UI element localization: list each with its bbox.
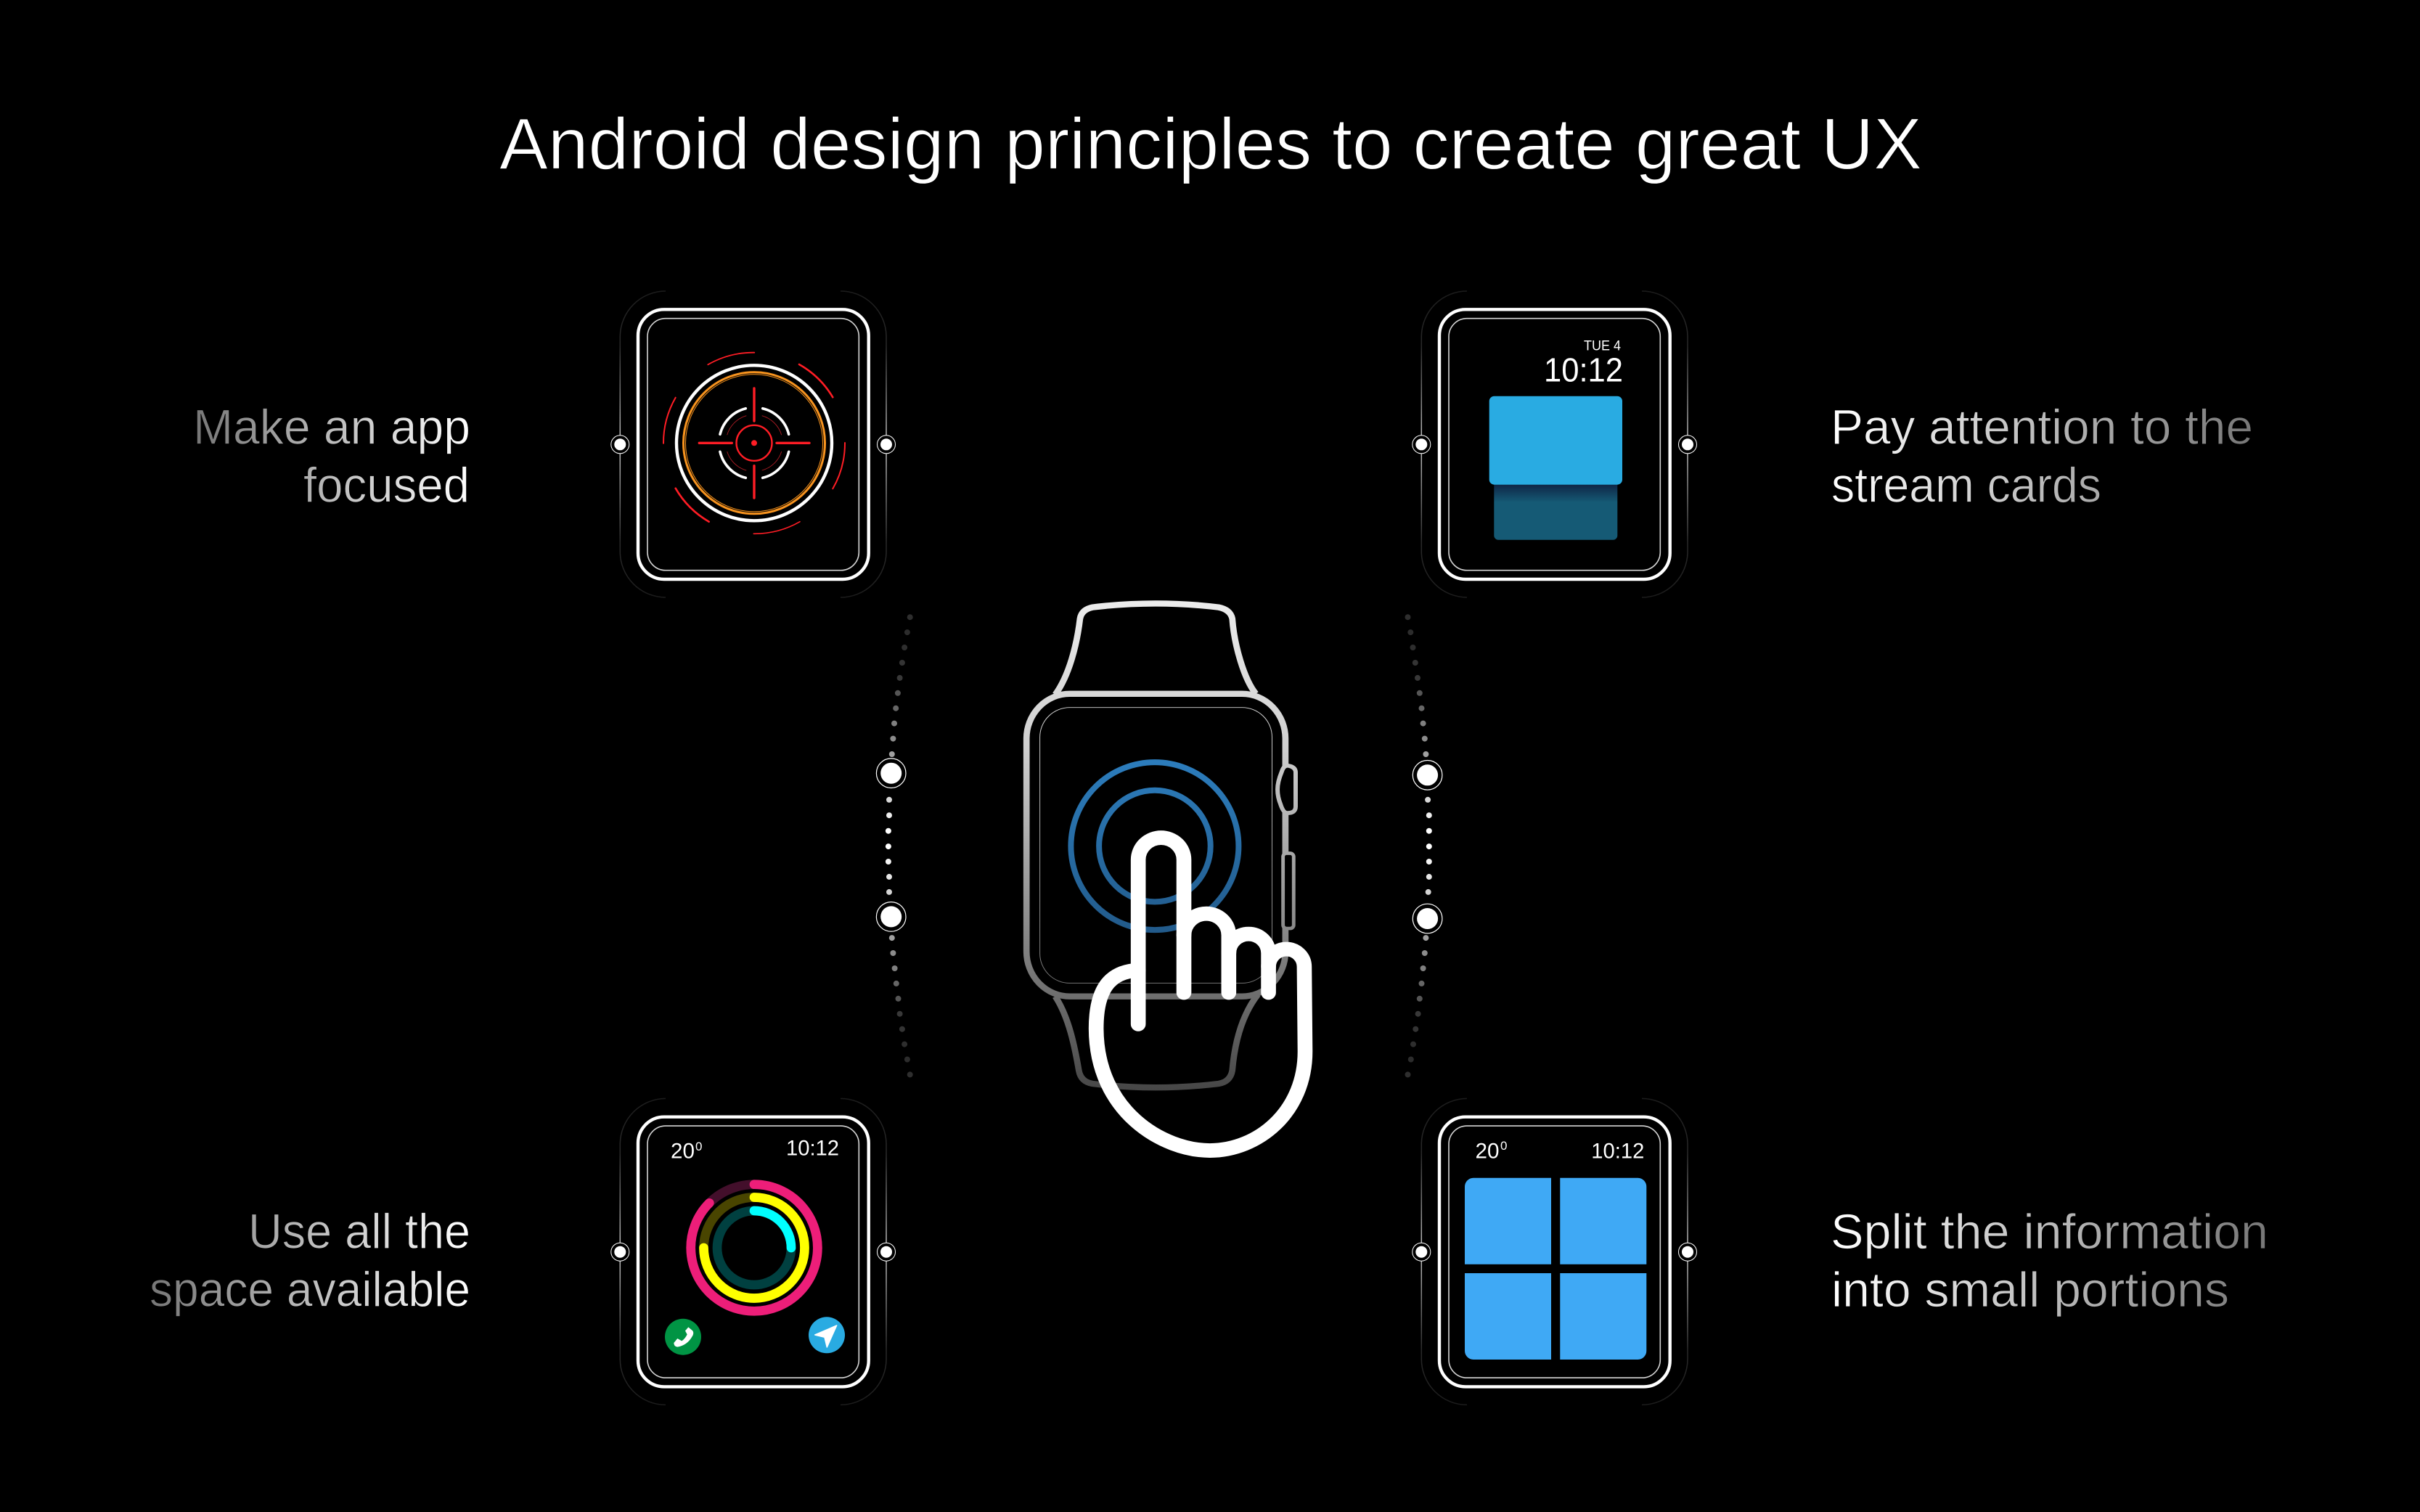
label: pay attention to the stream cards <box>1831 400 2253 513</box>
title: Android design principles to create great UX <box>499 104 1922 185</box>
screen edge <box>1040 708 1272 983</box>
watch: stream cards <box>1413 291 1697 597</box>
label: use all the space available: Use all the <box>248 1204 470 1259</box>
watch: split grid: 0 <box>1500 1139 1507 1153</box>
label: make an app focused: focused <box>303 458 470 513</box>
label: make an app focused: Make an app <box>193 400 470 455</box>
label: split the information into small portions: Split the information <box>1831 1204 2268 1259</box>
watch: activity rings <box>611 1098 896 1405</box>
watch: split grid <box>1413 1098 1697 1405</box>
label: use all the space available <box>150 1204 470 1317</box>
dotted arc: left <box>876 614 913 1077</box>
dotted arc: right <box>1405 614 1442 1077</box>
temperature: 20 <box>671 1139 695 1163</box>
side button <box>1283 854 1293 928</box>
chart: activity rings <box>691 1185 817 1311</box>
watch: activity rings: 0 <box>695 1140 702 1153</box>
time: 10:12 <box>1591 1139 1644 1163</box>
icon: navigation arrow <box>809 1317 845 1353</box>
crown <box>1278 766 1296 813</box>
back card <box>1494 485 1617 540</box>
central watch outline <box>1026 603 1296 1087</box>
bottom strap <box>1055 994 1258 1087</box>
date: TUE 4 <box>1584 339 1621 354</box>
touch ripple rings <box>1071 762 1238 930</box>
time: 10:12 <box>1544 351 1623 389</box>
top strap <box>1055 603 1256 695</box>
temperature: 20 <box>1475 1139 1500 1163</box>
icon: pointing hand <box>1096 838 1305 1151</box>
icon: phone <box>665 1319 701 1355</box>
label: make an app focused <box>193 400 470 513</box>
label: pay attention to the stream cards: stream cards <box>1831 458 2101 513</box>
time: 10:12 <box>786 1136 839 1160</box>
label: split the information into small portions: into small portions <box>1831 1262 2229 1317</box>
case <box>1026 694 1285 997</box>
label: use all the space available: space available <box>150 1262 470 1317</box>
watch: focused target <box>611 291 896 597</box>
icon: target rings <box>663 353 845 534</box>
label: pay attention to the stream cards: Pay attention to the <box>1831 400 2253 455</box>
front card <box>1489 396 1622 485</box>
tiles <box>1465 1178 1646 1360</box>
label: split the information into small portions <box>1831 1204 2268 1317</box>
